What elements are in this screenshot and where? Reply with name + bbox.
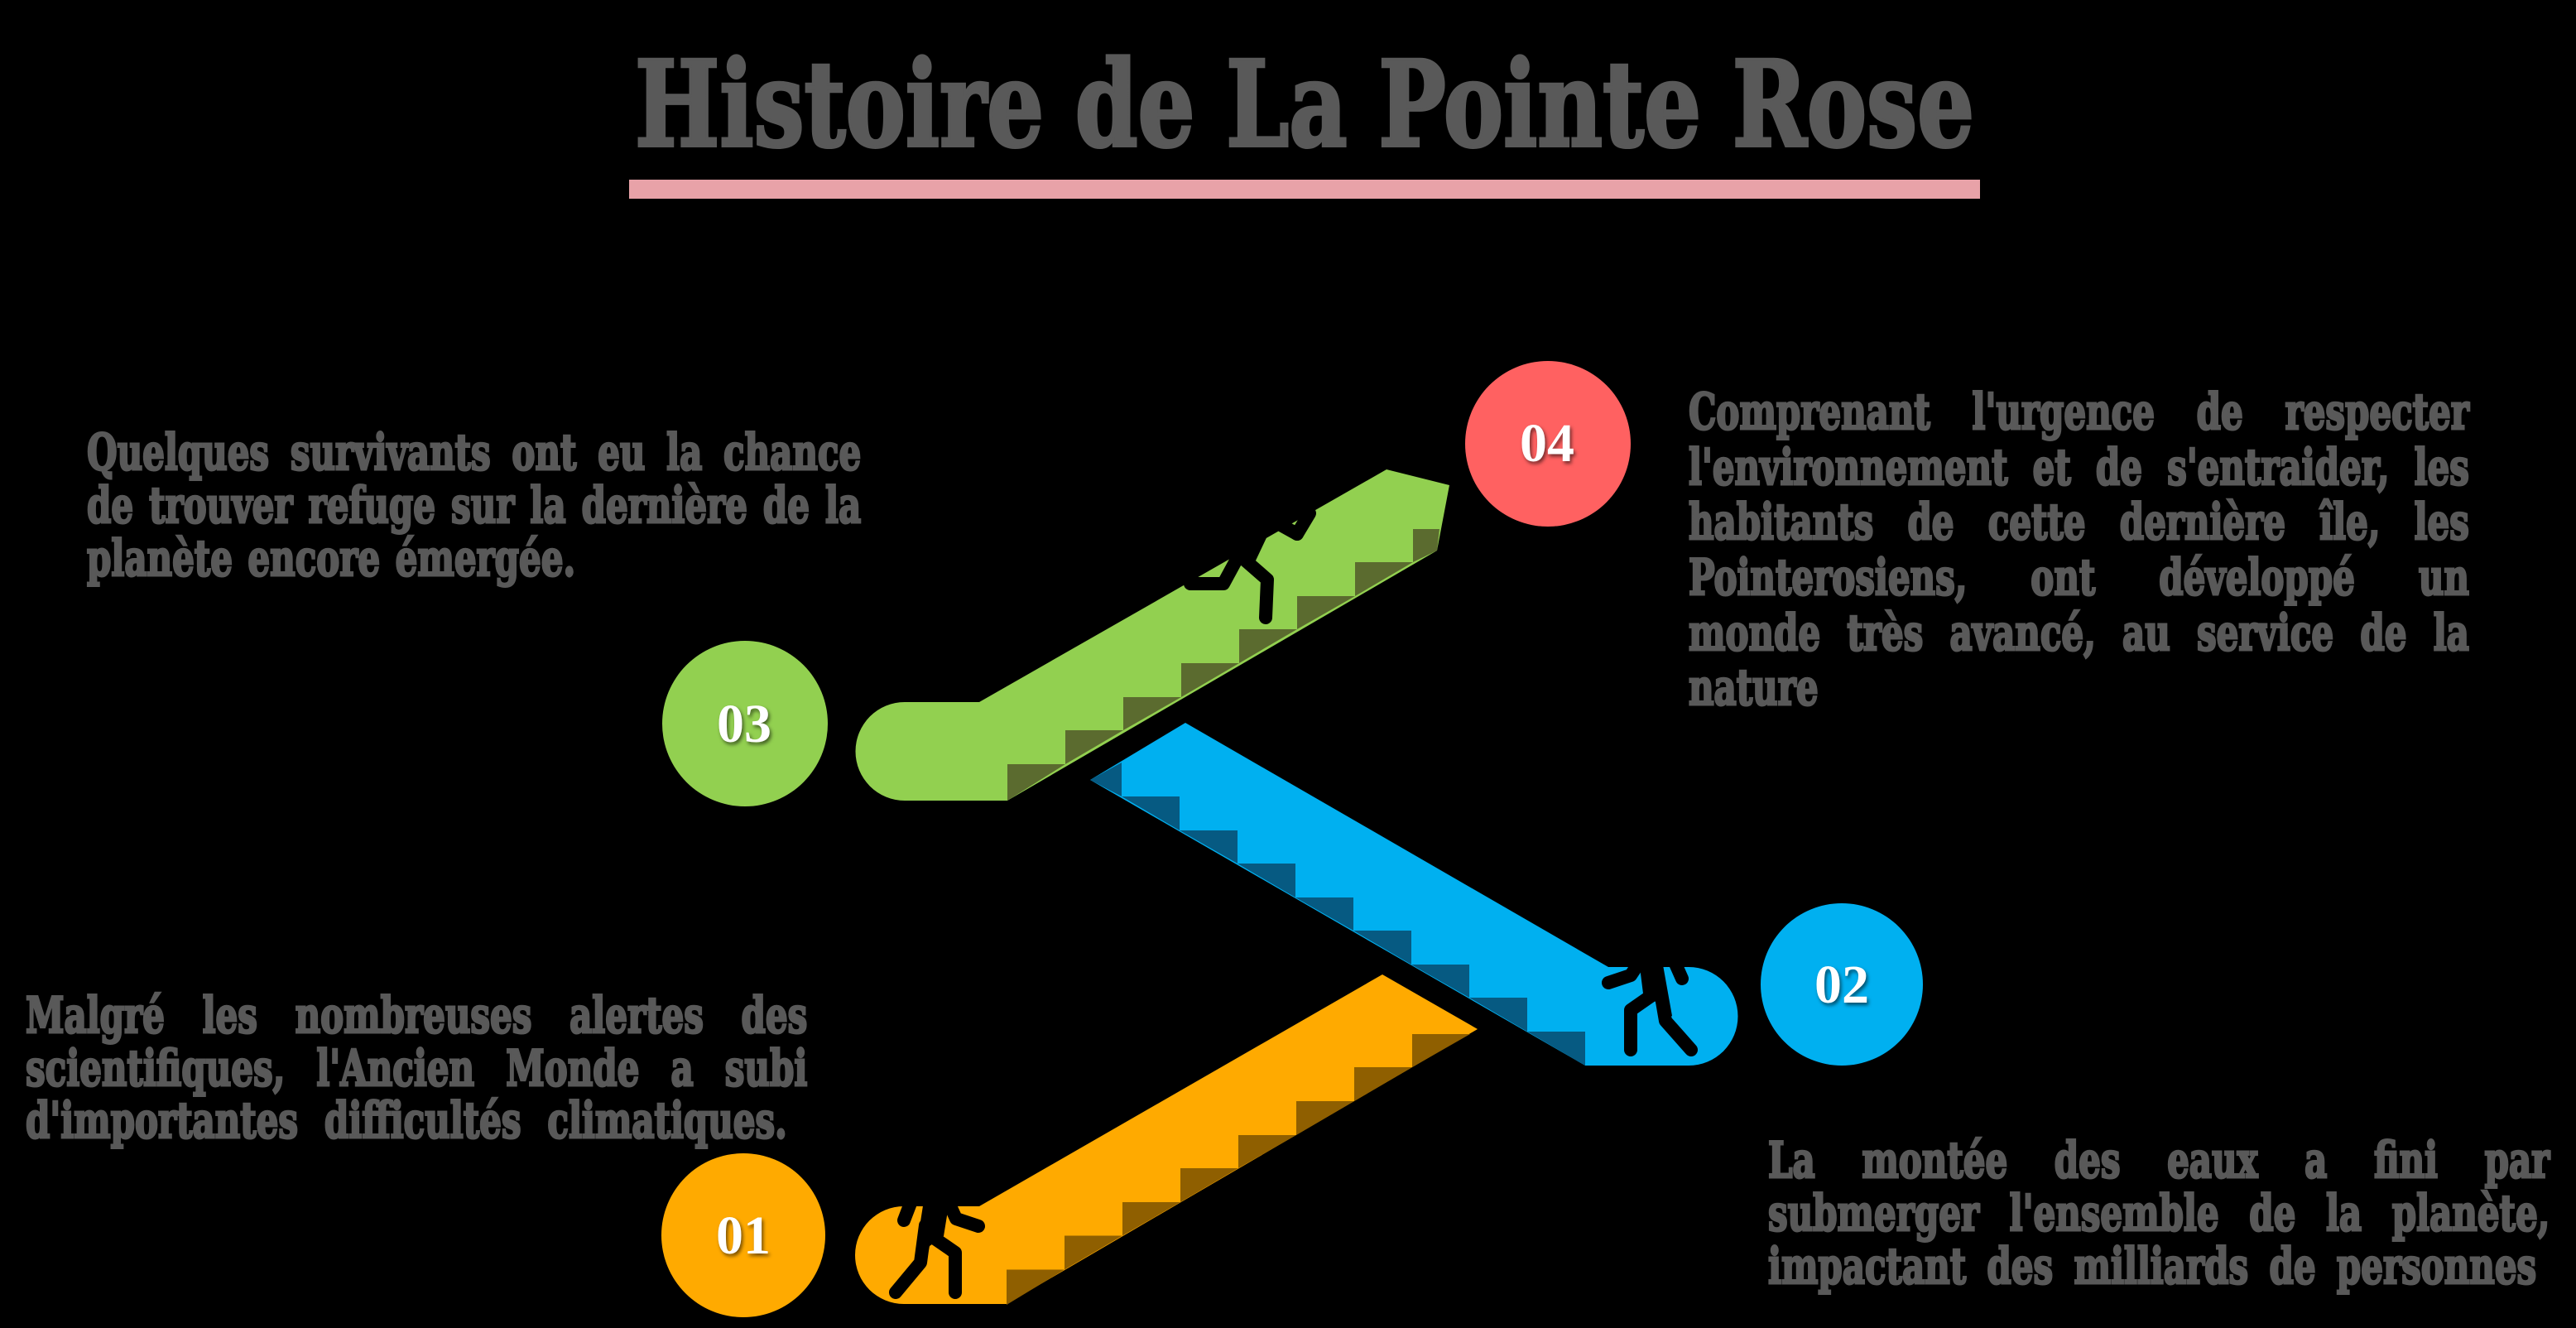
text block: step 01 xyxy=(26,987,808,1150)
text block: step 04: Comprenant l'urgence de respecter xyxy=(1689,383,2469,441)
text block: step 02: submerger l'ensemble de la planète, xyxy=(1768,1185,2550,1243)
text block: step 04: l'environnement et de s'entraider, les xyxy=(1689,439,2469,497)
step badge 01: 01 xyxy=(716,1205,771,1266)
title: Histoire de La Pointe Rose xyxy=(635,35,1974,174)
text block: step 04: habitants de cette dernière île, les xyxy=(1689,493,2469,551)
text block: step 02: impactant des milliards de personnes xyxy=(1768,1238,2536,1296)
step badge 02 xyxy=(1761,903,1923,1066)
icon: climbing figure on orange stairs xyxy=(896,1199,978,1292)
text block: step 03: de trouver refuge sur la dernière de la xyxy=(87,477,861,535)
text block: step 04 xyxy=(1689,383,2470,717)
text block: step 01: Malgré les nombreuses alertes des xyxy=(26,987,807,1045)
icon: climbing figure on green stairs xyxy=(1190,488,1310,618)
stairs 02: blue xyxy=(1090,723,1738,1066)
text block: step 03: Quelques survivants ont eu la chance xyxy=(87,424,861,482)
step badge 03: 03 xyxy=(717,694,771,754)
step badge 04 xyxy=(1465,361,1631,527)
text block: step 01: scientifiques, l'Ancien Monde a subi xyxy=(26,1040,807,1098)
text block: step 03 xyxy=(86,424,861,588)
step badge 04: 04 xyxy=(1520,413,1574,474)
text block: step 04: Pointerosiens, ont développé un xyxy=(1689,549,2469,607)
text block: step 01: d'importantes difficultés climatiques. xyxy=(26,1092,787,1150)
icon: climbing figure on blue stairs xyxy=(1608,956,1691,1050)
title underline xyxy=(629,180,1980,199)
step badge 02: 02 xyxy=(1814,955,1869,1015)
text block: step 03: planète encore émergée. xyxy=(87,530,575,588)
text block: step 02 xyxy=(1768,1132,2551,1296)
text block: step 04: monde très avancé, au service de la xyxy=(1689,604,2469,662)
stairs 03: green xyxy=(856,469,1449,801)
text block: step 04: nature xyxy=(1689,659,1819,717)
stairs 01: orange xyxy=(855,974,1478,1305)
step badge 01 xyxy=(661,1153,825,1317)
step badge 03 xyxy=(662,641,828,806)
text block: step 02: La montée des eaux a fini par xyxy=(1768,1132,2550,1190)
